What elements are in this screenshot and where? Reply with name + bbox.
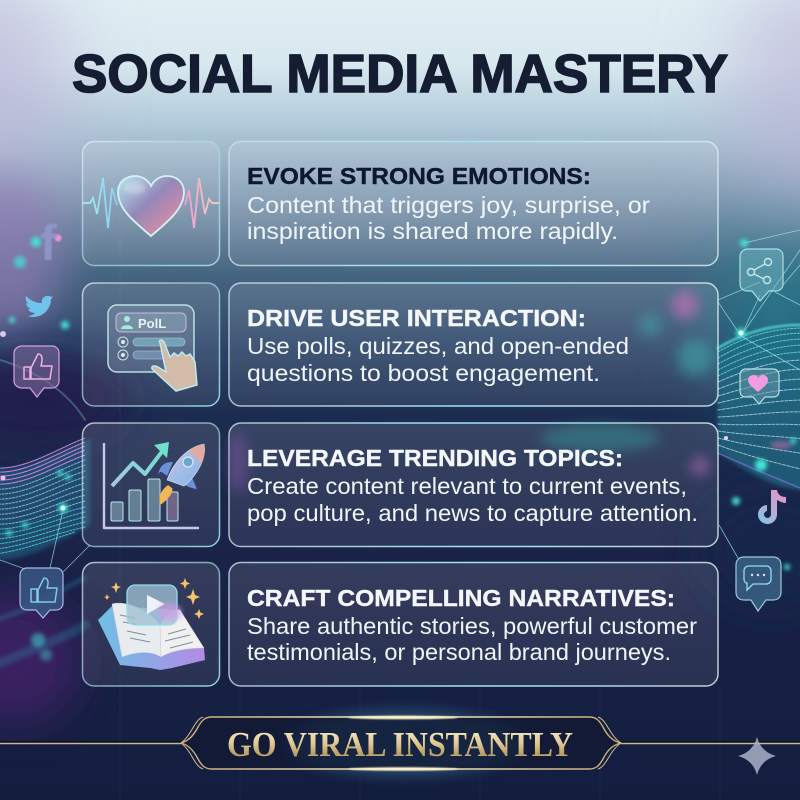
icon: like bubble left bottom bbox=[20, 568, 63, 618]
icon card: poll and pointing hand bbox=[82, 283, 220, 406]
text panel: drive user interaction bbox=[229, 283, 718, 406]
row 4: craft compelling narratives bbox=[82, 562, 718, 686]
banner: go viral instantly bbox=[0, 709, 800, 777]
text panel: craft compelling narratives bbox=[229, 562, 718, 686]
icon card: open book and video bbox=[82, 562, 220, 686]
text panel: evoke strong emotions bbox=[229, 142, 718, 266]
icon: chat bubble bbox=[736, 557, 781, 611]
text panel: leverage trending topics bbox=[228, 423, 718, 546]
text panel: drive user interaction: questions to boost engagement. bbox=[247, 360, 600, 386]
left data wave mesh bbox=[0, 360, 90, 665]
text panel: evoke strong emotions: EVOKE STRONG EMOTIONS: bbox=[247, 163, 591, 189]
glowing nodes bbox=[0, 234, 796, 661]
row 1: evoke strong emotions bbox=[82, 142, 718, 266]
banner: go viral instantly: GO VIRAL INSTANTLY bbox=[227, 725, 573, 764]
text panel: craft compelling narratives: testimonials, or personal brand journeys. bbox=[247, 639, 671, 665]
text panel: leverage trending topics: LEVERAGE TRENDING TOPICS: bbox=[247, 445, 623, 471]
text panel: evoke strong emotions: inspiration is shared more rapidly. bbox=[247, 218, 618, 244]
icon card: heart with pulse bbox=[82, 142, 220, 266]
icon card: growth chart and rocket bbox=[82, 423, 220, 546]
row 2: drive user interaction bbox=[82, 283, 718, 406]
text panel: leverage trending topics: pop culture, and news to capture attention. bbox=[247, 500, 698, 526]
row 3: leverage trending topics bbox=[82, 423, 718, 546]
icon: tiktok note bbox=[758, 490, 786, 524]
pointing hand bbox=[152, 340, 197, 391]
title: SOCIAL MEDIA MASTERY bbox=[72, 44, 728, 104]
text panel: drive user interaction: Use polls, quizzes, and open-ended bbox=[247, 333, 629, 359]
icon: like bubble left top bbox=[14, 346, 59, 397]
icon: twitter bird bbox=[26, 295, 53, 317]
network lines and nodes bbox=[0, 230, 800, 572]
text panel: evoke strong emotions: Content that triggers joy, surprise, or bbox=[247, 192, 650, 218]
text panel: craft compelling narratives: Share authentic stories, powerful customer bbox=[247, 613, 697, 639]
icon: facebook logo: f bbox=[40, 215, 57, 271]
icon: sparkle watermark bbox=[738, 737, 776, 775]
text panel: leverage trending topics: Create content relevant to current events, bbox=[247, 473, 687, 499]
icon: share bubble bbox=[740, 249, 783, 301]
icon: heart bubble bbox=[740, 369, 779, 404]
text panel: craft compelling narratives: CRAFT COMPELLING NARRATIVES: bbox=[247, 585, 675, 611]
icon card: poll and pointing hand: PolL bbox=[138, 316, 166, 331]
right data wave mesh bbox=[718, 324, 800, 490]
text panel: drive user interaction: DRIVE USER INTERACTION: bbox=[247, 305, 586, 331]
